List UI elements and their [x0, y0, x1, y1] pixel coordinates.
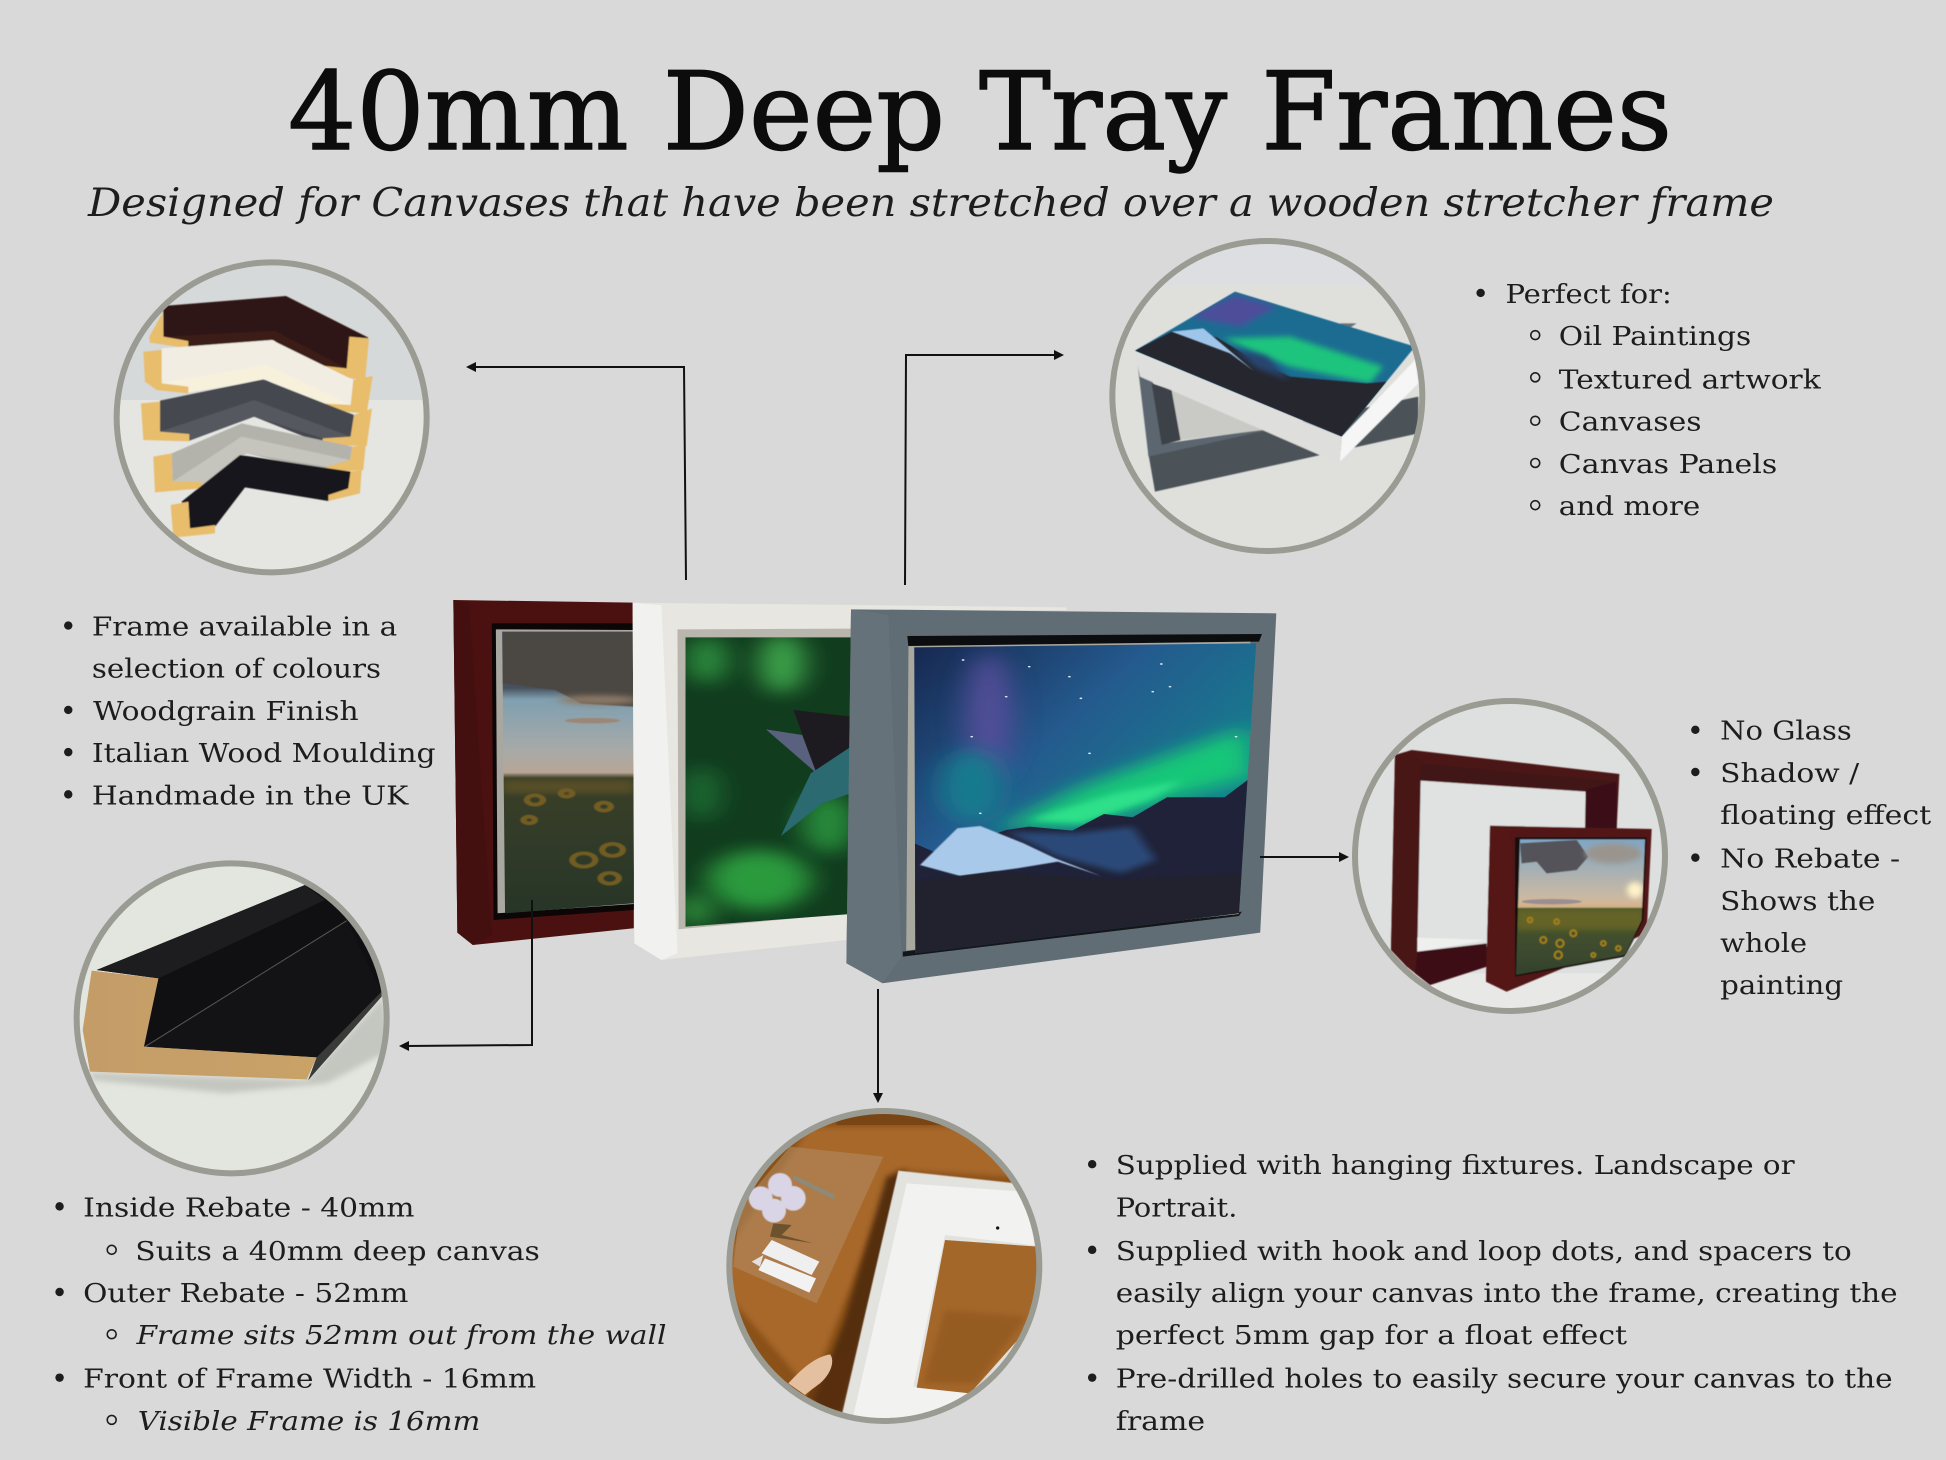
list: rebate dimensions: Inside Rebate - 40mm	[83, 1193, 415, 1223]
list: no glass, floating effect: No Glass	[1720, 717, 1852, 747]
arrow: moulding samples	[466, 362, 686, 580]
circle photo: mahogany frames with sunflower canvas	[1350, 697, 1677, 1020]
list: frame features: Frame available in a	[92, 612, 397, 642]
list: rebate dimensions: Outer Rebate - 52mm	[83, 1279, 408, 1309]
frame: grey	[846, 609, 1276, 983]
ring	[1112, 241, 1422, 551]
spacers	[762, 1240, 819, 1275]
arrow: moulding profile	[399, 900, 532, 1051]
list: fixtures and fitting: Supplied with hanging fixtures. Landscape or	[1116, 1151, 1795, 1181]
list: fixtures and fitting	[1088, 1151, 1898, 1437]
title: 40mm Deep Tray Frames	[288, 50, 1672, 175]
icon: hummingbird	[766, 710, 851, 836]
list: no glass, floating effect: painting	[1720, 971, 1843, 1001]
list: frame features: Woodgrain Finish	[93, 697, 359, 727]
circle photo: black moulding profile	[73, 860, 393, 1180]
list: fixtures and fitting: easily align your canvas into the frame, creating the	[1116, 1279, 1898, 1309]
list: no glass, floating effect: whole	[1720, 929, 1807, 959]
list: perfect for: Canvas Panels	[1559, 450, 1777, 480]
list: fixtures and fitting: frame	[1116, 1407, 1205, 1437]
ring	[729, 1111, 1039, 1421]
list: perfect for: Perfect for:	[1505, 280, 1672, 310]
circle photo: fixtures pack and white frame	[723, 1107, 1050, 1430]
list: rebate dimensions: Suits a 40mm deep canvas	[135, 1237, 540, 1267]
list: frame features: Handmade in the UK	[92, 781, 409, 811]
list: frame features: selection of colours	[92, 655, 381, 685]
list: no glass, floating effect: Shows the	[1720, 887, 1875, 917]
stars	[962, 659, 1238, 814]
list: fixtures and fitting: Pre-drilled holes to easily secure your canvas to the	[1116, 1365, 1893, 1395]
finger	[788, 1354, 832, 1395]
list: frame features	[64, 612, 436, 811]
list: rebate dimensions: Front of Frame Width - 16mm	[83, 1365, 536, 1395]
list: perfect for: Canvases	[1559, 408, 1702, 438]
central product photo: three tray frames	[453, 600, 1276, 983]
list: perfect for	[1476, 280, 1821, 522]
circle photo: canvas lifted from tray frame	[1107, 237, 1433, 558]
frame: mahogany	[453, 600, 638, 945]
subtitle: Designed for Canvases that have been stretched over a wooden stretcher frame	[87, 181, 1774, 226]
list: no glass, floating effect: floating effect	[1720, 801, 1932, 831]
list: rebate dimensions: Frame sits 52mm out from the wall	[135, 1321, 666, 1351]
list: perfect for: and more	[1559, 492, 1700, 522]
list: fixtures and fitting: perfect 5mm gap for a float effect	[1116, 1321, 1628, 1351]
list: perfect for: Oil Paintings	[1559, 322, 1751, 352]
mountains	[914, 777, 1259, 955]
list: fixtures and fitting: Portrait.	[1116, 1193, 1237, 1223]
felt dots	[749, 1173, 806, 1223]
list: rebate dimensions	[55, 1193, 666, 1437]
circle photo: stacked moulding samples	[113, 257, 433, 577]
list: frame features: Italian Wood Moulding	[92, 739, 436, 769]
list: no glass, floating effect	[1691, 717, 1932, 1001]
arrow: floating effect	[1260, 852, 1349, 862]
ring	[1355, 701, 1665, 1011]
arrow: canvas in tray	[905, 350, 1064, 585]
white frame	[842, 1170, 1036, 1415]
frame: white	[633, 603, 1067, 960]
list: no glass, floating effect: No Rebate -	[1720, 845, 1900, 875]
ring	[77, 863, 387, 1173]
list: fixtures and fitting: Supplied with hook and loop dots, and spacers to	[1116, 1237, 1852, 1267]
list: no glass, floating effect: Shadow /	[1720, 759, 1859, 789]
ring	[117, 262, 427, 572]
list: rebate dimensions: Visible Frame is 16mm	[138, 1407, 480, 1437]
list: perfect for: Textured artwork	[1559, 366, 1821, 396]
clear plastic bag	[733, 1147, 883, 1303]
arrow: fixtures	[873, 989, 883, 1103]
